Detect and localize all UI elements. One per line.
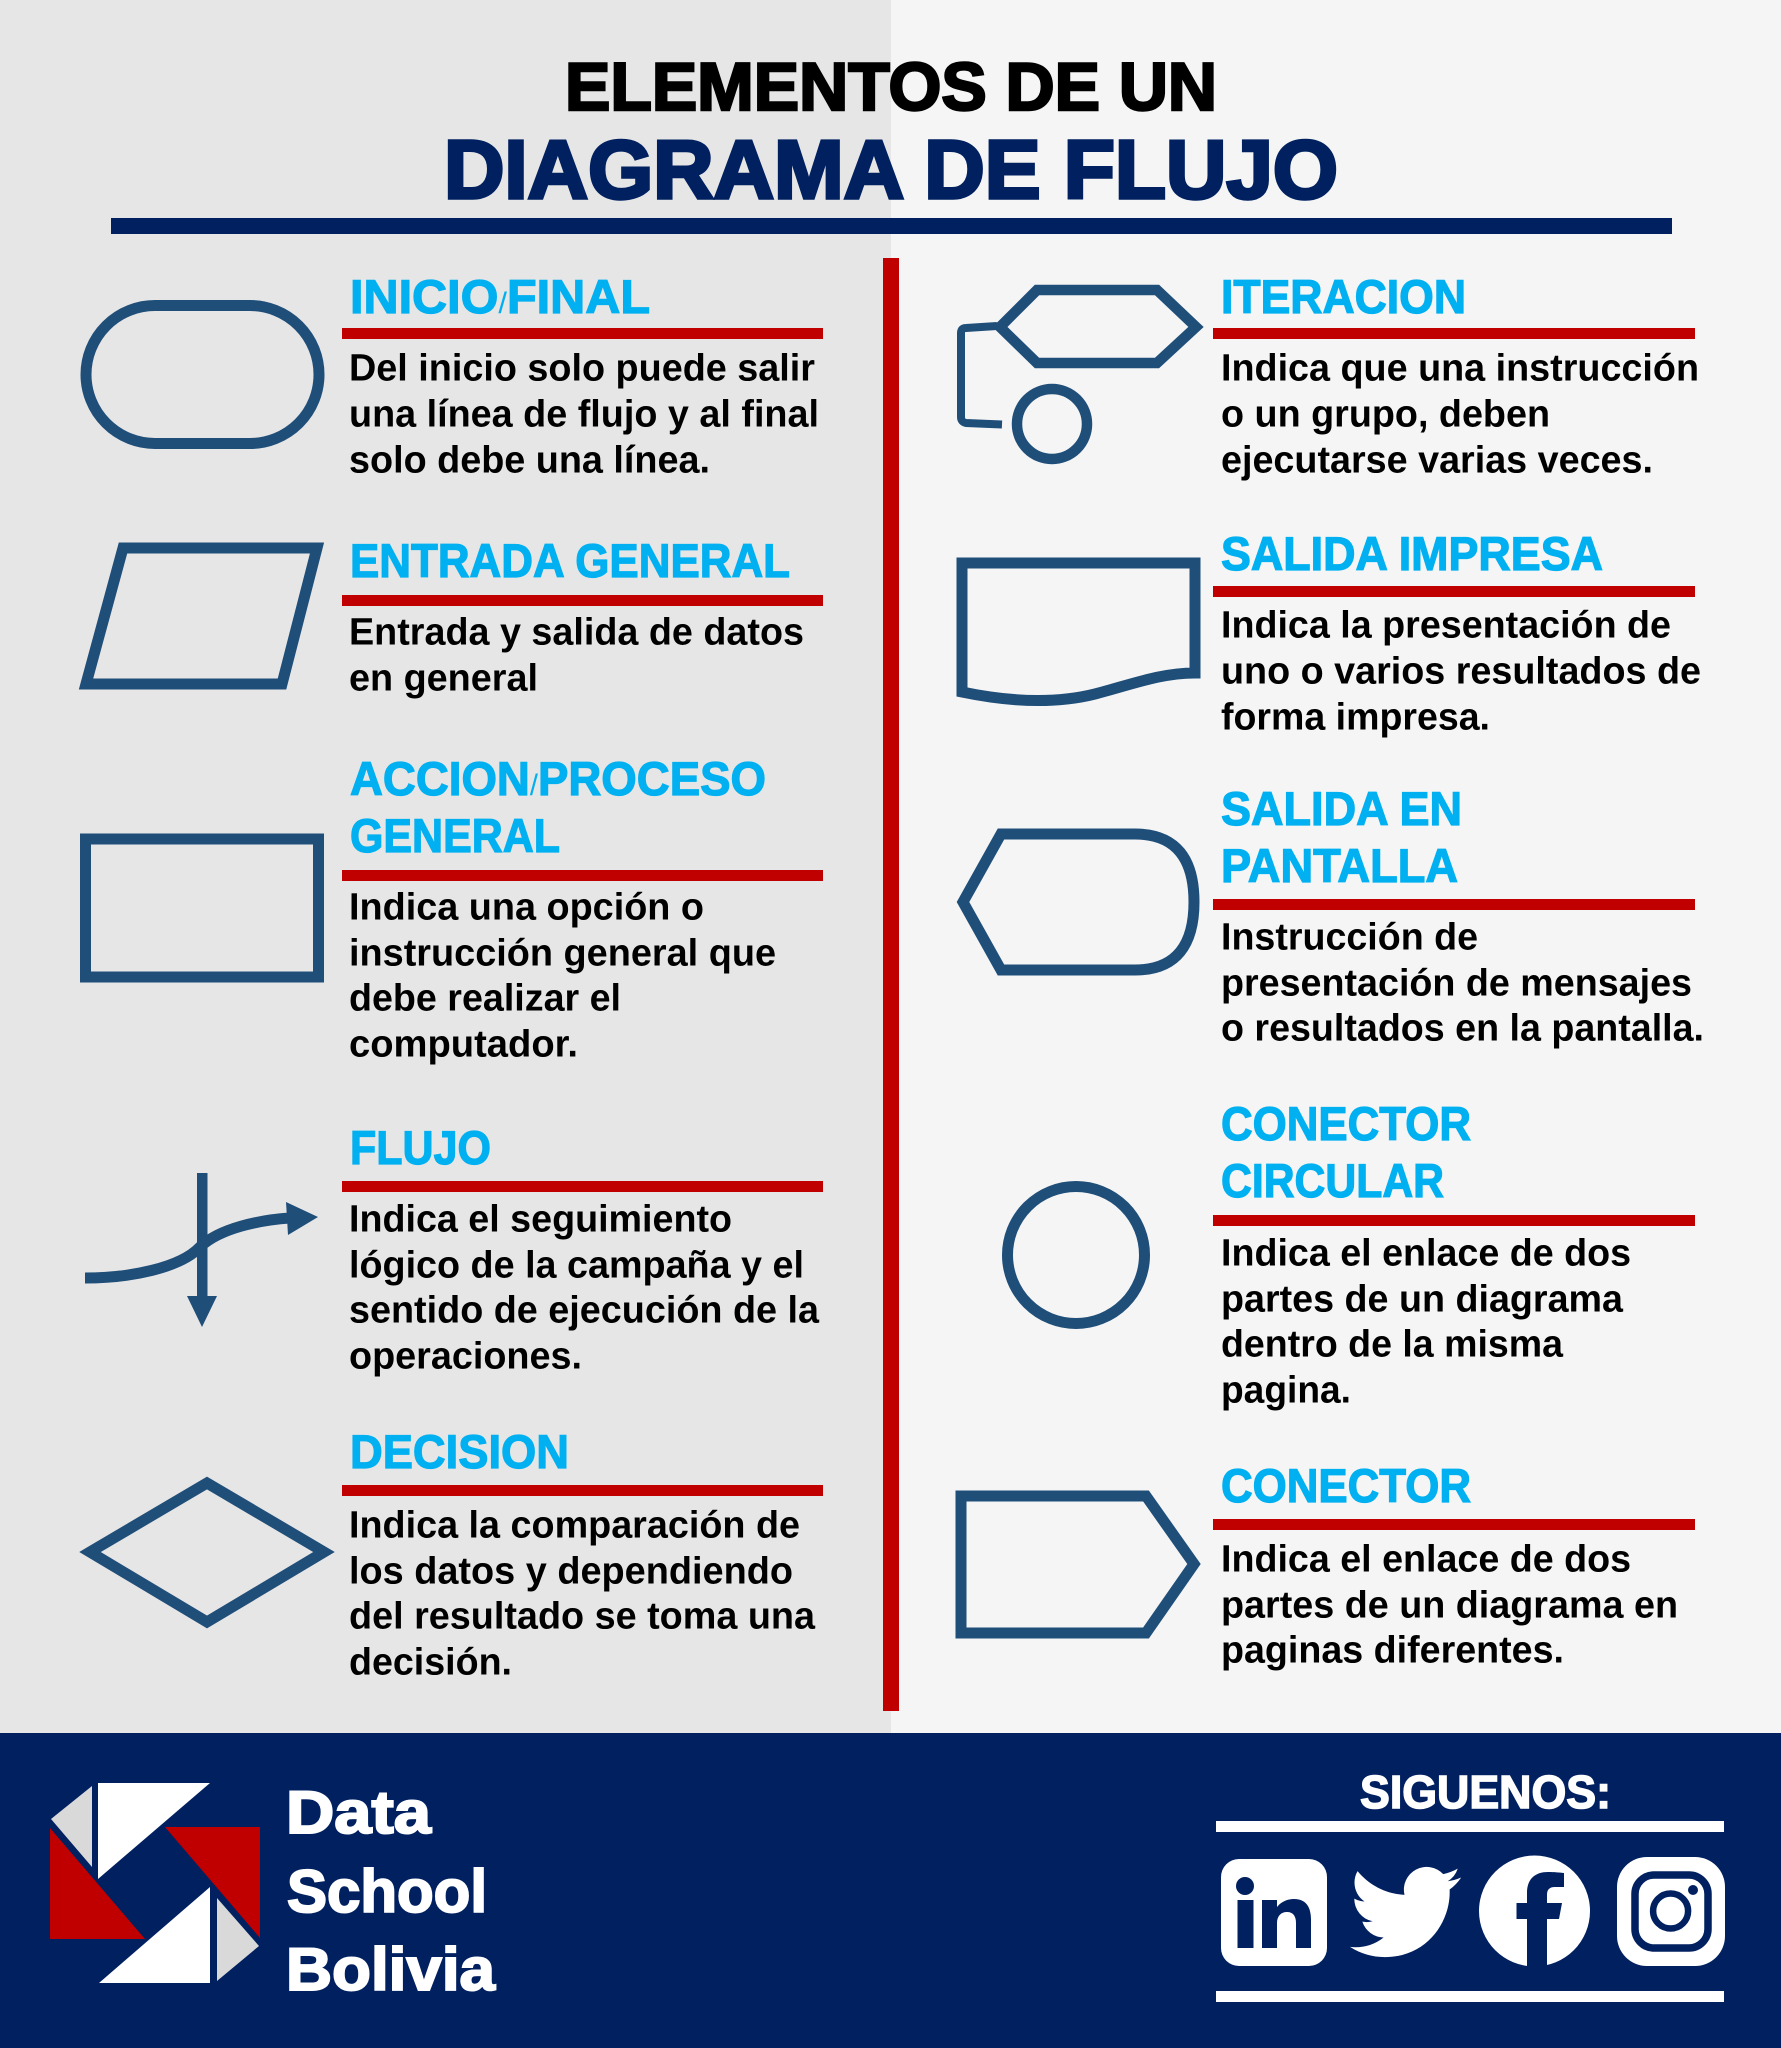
text: conector circular [1221, 1233, 1631, 1412]
rule: inicio/final [342, 328, 823, 339]
text: salida en pantalla [1221, 917, 1704, 1050]
text: inicio/final: una línea de flujo y al final [349, 394, 819, 436]
text: conector: paginas diferentes. [1221, 1630, 1564, 1672]
text: conector: Indica el enlace de dos [1221, 1539, 1631, 1581]
icon: twitter [1350, 1867, 1461, 1957]
text: flujo: lógico de la campaña y el [349, 1245, 804, 1287]
social rule bottom [1216, 1991, 1724, 2002]
text: conector circular: partes de un diagrama [1221, 1279, 1624, 1321]
title: DIAGRAMA DE FLUJO [444, 123, 1338, 216]
rule: salida en pantalla [1213, 899, 1695, 910]
rule: conector circular [1213, 1215, 1695, 1226]
icon: flow arrows [85, 1173, 318, 1327]
heading: siguenos: SIGUENOS: [1360, 1766, 1611, 1818]
text: accion/proceso: computador. [349, 1024, 578, 1066]
heading: salida en pantalla: PANTALLA [1221, 839, 1458, 892]
text: accion/proceso: instrucción general que [349, 933, 776, 975]
background: right half [891, 0, 1781, 1733]
heading: inicio/final: INICIO/FINAL [350, 270, 650, 323]
text: iteracion [1221, 348, 1699, 482]
icon: facebook [1479, 1856, 1590, 1967]
text: conector: partes de un diagrama en [1221, 1585, 1678, 1627]
heading: decision: DECISION [350, 1425, 569, 1478]
heading: salida en pantalla [1221, 782, 1462, 892]
icon: off-page connector [961, 1496, 1194, 1633]
title: ELEMENTOS DE UN [565, 49, 1217, 125]
text: decision: decisión. [349, 1642, 512, 1684]
panel: salida en pantalla [963, 782, 1704, 1050]
text: conector circular: Indica el enlace de dos [1221, 1233, 1631, 1275]
text: iteracion: o un grupo, deben [1221, 394, 1550, 436]
text: decision: Indica la comparación de [349, 1505, 800, 1547]
icon: diamond [90, 1483, 324, 1622]
central red divider [883, 258, 899, 1711]
text: inicio/final: Del inicio solo puede salir [349, 348, 815, 390]
brand name [286, 1779, 496, 2003]
background: left half [0, 0, 891, 1733]
heading: salida en pantalla: SALIDA EN [1221, 782, 1462, 835]
icon: instagram [1617, 1857, 1725, 1966]
footer band [0, 1733, 1781, 2048]
title rule [111, 218, 1672, 234]
text: decision: del resultado se toma una [349, 1596, 816, 1638]
panel: flujo [85, 1121, 823, 1378]
panel: iteracion [961, 270, 1699, 482]
text: inicio/final [349, 348, 819, 482]
text: flujo: sentido de ejecución de la [349, 1290, 820, 1332]
text: accion/proceso: debe realizar el [349, 978, 621, 1020]
social rule top [1216, 1821, 1724, 1832]
text: salida en pantalla: presentación de mensajes [1221, 963, 1692, 1005]
heading: entrada general: ENTRADA GENERAL [350, 534, 790, 587]
icon: terminator [86, 306, 319, 444]
icon: linkedin [1221, 1859, 1327, 1966]
brand name: Data [286, 1779, 432, 1846]
icon: document [962, 563, 1195, 701]
text: conector [1221, 1539, 1678, 1672]
heading: salida impresa: SALIDA IMPRESA [1221, 527, 1603, 580]
heading: accion/proceso general: GENERAL [350, 809, 560, 862]
text: entrada general: en general [349, 658, 538, 700]
text: decision: los datos y dependiendo [349, 1551, 793, 1593]
icon: rectangle [86, 839, 318, 977]
text: conector circular: pagina. [1221, 1370, 1351, 1412]
rule: decision [342, 1485, 823, 1496]
icon: display [963, 834, 1194, 970]
text: salida impresa: forma impresa. [1221, 697, 1490, 739]
text: salida en pantalla: Instrucción de [1221, 917, 1478, 959]
heading: conector: CONECTOR [1221, 1459, 1471, 1512]
heading: accion/proceso general: ACCION/PROCESO [350, 752, 766, 805]
heading: flujo: FLUJO [350, 1121, 491, 1174]
heading: conector circular: CONECTOR [1221, 1097, 1471, 1150]
text: salida en pantalla: o resultados en la pantalla. [1221, 1008, 1704, 1050]
text: flujo: Indica el seguimiento [349, 1199, 732, 1241]
panel: salida impresa [962, 527, 1701, 739]
text: flujo [349, 1199, 820, 1378]
text: entrada general [349, 612, 804, 700]
rule: flujo [342, 1181, 823, 1192]
rule: entrada general [342, 595, 823, 606]
text: iteracion: Indica que una instrucción [1221, 348, 1699, 390]
text: salida impresa: uno o varios resultados de [1221, 651, 1701, 693]
text: accion/proceso: Indica una opción o [349, 887, 704, 929]
icon: Data School Bolivia logo [50, 1783, 260, 1983]
text: inicio/final: solo debe una línea. [349, 440, 710, 482]
panel: conector circular [1008, 1097, 1695, 1412]
rule: accion/proceso [342, 870, 823, 881]
heading: accion/proceso general [350, 752, 766, 862]
text: accion/proceso [349, 887, 776, 1066]
heading: conector circular [1221, 1097, 1471, 1207]
panel: inicio/final [86, 270, 823, 482]
rule: iteracion [1213, 328, 1695, 339]
panel: conector [961, 1459, 1695, 1672]
icon: circle [1008, 1186, 1144, 1324]
text: salida impresa [1221, 605, 1701, 739]
rule: salida impresa [1213, 586, 1695, 597]
title [444, 49, 1338, 216]
panel: entrada general [86, 534, 823, 700]
heading: iteracion: ITERACION [1221, 270, 1466, 323]
text: salida impresa: Indica la presentación de [1221, 605, 1671, 647]
heading: conector circular: CIRCULAR [1221, 1154, 1444, 1207]
icon: parallelogram [86, 548, 317, 684]
panel: decision [90, 1425, 823, 1684]
rule: conector [1213, 1519, 1695, 1530]
text: flujo: operaciones. [349, 1336, 582, 1378]
text: entrada general: Entrada y salida de datos [349, 612, 804, 654]
brand name: Bolivia [286, 1936, 496, 2003]
icon: iteration hexagon and circle [961, 290, 1196, 459]
text: iteracion: ejecutarse varias veces. [1221, 440, 1653, 482]
text: conector circular: dentro de la misma [1221, 1324, 1564, 1366]
text: decision [349, 1505, 816, 1684]
brand name: School [287, 1858, 487, 1925]
panel: accion/proceso general [86, 752, 823, 1066]
